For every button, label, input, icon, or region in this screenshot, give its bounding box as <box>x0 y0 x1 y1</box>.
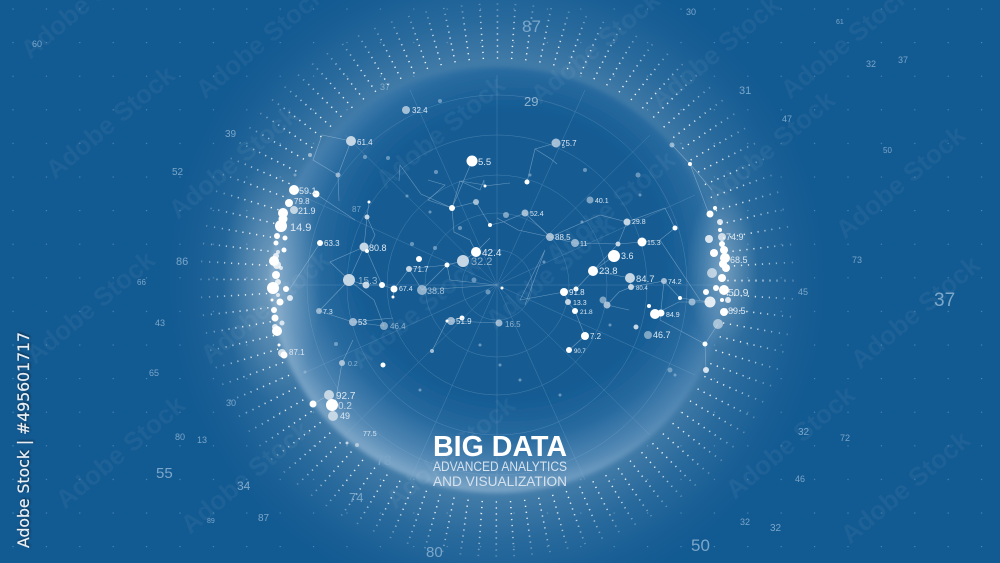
value labels on the sphere: 5 <box>562 144 565 150</box>
value labels on the sphere: 77.5 <box>363 431 377 438</box>
scattered outer numbers: 37 <box>934 290 955 311</box>
right edge dot cluster <box>702 206 731 373</box>
scattered outer numbers: 37 <box>898 55 908 65</box>
scattered outer numbers: 32 <box>770 523 782 534</box>
scattered outer numbers: 52 <box>172 167 184 178</box>
value labels on the sphere: 87 <box>352 205 361 214</box>
subtitle: AND VISUALIZATION <box>433 474 567 489</box>
stock watermarks: Adobe Stock <box>720 379 861 505</box>
stock watermarks: Adobe Stock <box>540 144 681 270</box>
value labels on the sphere: 23.8 <box>599 266 618 277</box>
value labels on the sphere: 29 <box>524 94 538 109</box>
scattered outer numbers: 47 <box>782 114 792 124</box>
value labels on the sphere: 7.2 <box>590 332 602 341</box>
polar grid <box>280 75 715 490</box>
value labels on the sphere: 92.7 <box>336 391 356 402</box>
stock watermarks: Adobe Stock <box>845 249 986 375</box>
scattered outer numbers: 30 <box>226 398 236 408</box>
value labels on the sphere: 51.9 <box>456 317 472 326</box>
scattered outer numbers: 78 <box>376 452 392 468</box>
stock watermarks: Adobe Stock <box>835 424 976 550</box>
stock watermarks: Adobe Stock <box>380 389 521 515</box>
value labels on the sphere: 49 <box>340 411 350 421</box>
value labels on the sphere: 89.5 <box>728 306 746 316</box>
light network nodes <box>290 106 696 447</box>
scattered outer numbers: 86 <box>176 256 188 268</box>
value labels on the sphere: 5.5 <box>478 157 491 168</box>
title block <box>433 431 567 489</box>
stock watermarks: Adobe Stock <box>163 99 304 225</box>
title: BIG DATA <box>433 431 567 463</box>
value labels on the sphere: 7.3 <box>323 309 333 316</box>
scattered outer numbers: 80 <box>426 544 443 561</box>
scattered outer numbers: 30 <box>686 7 696 17</box>
scattered outer numbers: 61 <box>836 19 844 26</box>
scattered outer numbers: 32 <box>866 59 876 69</box>
stock watermarks: Adobe Stock <box>20 244 161 370</box>
left rim glow <box>222 160 322 400</box>
value labels on the sphere: 91.8 <box>569 288 585 297</box>
value labels on the sphere: 59.1 <box>299 186 317 196</box>
scattered outer numbers: 87 <box>522 17 541 36</box>
stock watermarks: Adobe Stock <box>370 69 511 195</box>
scattered outer numbers: 73 <box>852 255 862 265</box>
value labels on the sphere: 11 <box>580 241 587 248</box>
bright network nodes <box>310 156 692 411</box>
value labels on the sphere: 21.8 <box>580 309 593 316</box>
value labels on the sphere: 79.8 <box>294 197 310 206</box>
right rim glow <box>686 188 758 348</box>
value labels on the sphere: 32.2 <box>471 256 492 268</box>
value labels on the sphere: 15.3 <box>647 240 661 247</box>
value labels on the sphere: 74.2 <box>668 279 682 286</box>
scattered outer numbers: 87 <box>258 513 270 524</box>
scattered outer numbers: 32 <box>740 517 750 527</box>
constellation links <box>289 135 718 416</box>
scattered outer numbers: 55 <box>156 465 173 482</box>
value labels on the sphere: 21.9 <box>298 206 316 216</box>
value labels on the sphere: 68.5 <box>730 255 748 265</box>
stock id sidebar text: Adobe Stock | #495601717 <box>14 332 33 548</box>
scattered outer numbers: 39 <box>225 129 237 140</box>
value labels on the sphere: 46.7 <box>653 330 671 340</box>
stock watermarks: Adobe Stock <box>40 59 181 185</box>
value labels on the sphere: 16.5 <box>505 320 521 329</box>
scattered outer numbers: 31 <box>739 85 751 97</box>
value labels on the sphere: 80.4 <box>636 286 648 292</box>
value labels on the sphere: 42.4 <box>482 248 502 259</box>
stock watermarks: Adobe Stock <box>175 414 316 540</box>
scattered outer numbers: 46 <box>795 474 805 484</box>
value labels on the sphere: 87.1 <box>289 348 305 357</box>
value labels on the sphere: 84.9 <box>666 312 680 319</box>
value labels on the sphere: 13.3 <box>573 300 587 307</box>
value labels on the sphere: 80.8 <box>369 243 387 253</box>
value labels on the sphere: 15.3 <box>358 276 378 287</box>
stock watermarks: Adobe Stock <box>830 119 971 245</box>
value labels on the sphere: 46.4 <box>390 322 406 331</box>
radial dot rings <box>201 4 793 556</box>
value labels on the sphere: 90.7 <box>574 349 586 355</box>
value labels on the sphere: 61.4 <box>357 138 373 147</box>
stock watermarks: Adobe Stock <box>700 84 841 210</box>
value labels on the sphere: 0.2 <box>348 361 358 368</box>
value labels on the sphere: 37 <box>380 82 390 92</box>
scattered outer numbers: 32 <box>798 427 810 438</box>
scattered outer numbers: 13 <box>197 435 207 445</box>
stock watermarks: Adobe Stock <box>345 249 486 375</box>
scattered outer numbers: 74 <box>349 490 363 505</box>
value labels on the sphere: 38.8 <box>427 286 445 296</box>
left edge dot cluster <box>267 185 320 358</box>
value labels on the sphere: 53 <box>358 318 367 327</box>
stock watermarks: Adobe Stock <box>50 389 191 515</box>
subtitle: ADVANCED ANALYTICS <box>433 459 567 474</box>
value labels on the sphere: 63.3 <box>324 239 340 248</box>
value labels on the sphere: 84.7 <box>636 274 654 285</box>
scattered outer numbers: 89 <box>207 518 215 525</box>
scattered outer numbers: 50 <box>691 536 710 555</box>
value labels on the sphere: 71.7 <box>413 265 429 274</box>
value labels on the sphere: 29.8 <box>632 219 646 226</box>
value labels on the sphere: 50.9 <box>728 287 749 299</box>
scattered outer numbers: 34 <box>237 479 251 493</box>
value labels on the sphere: 88.5 <box>555 233 571 242</box>
scattered outer numbers: 60 <box>32 39 42 49</box>
sphere <box>271 67 723 493</box>
value labels on the sphere: 75.7 <box>561 139 577 148</box>
stock watermarks: Adobe Stock <box>195 244 336 370</box>
value labels on the sphere: 14.9 <box>290 222 311 234</box>
value labels on the sphere: 74.9 <box>726 232 744 242</box>
stock watermarks: Adobe Stock <box>480 209 621 335</box>
value labels on the sphere <box>289 82 749 438</box>
scattered outer numbers: 43 <box>155 318 165 328</box>
scattered outer numbers: 65 <box>149 368 159 378</box>
scattered outer numbers: 45 <box>798 287 808 297</box>
scattered outer numbers: 72 <box>840 433 850 443</box>
scattered outer numbers: 50 <box>883 146 892 155</box>
value labels on the sphere: 0.2 <box>338 401 352 412</box>
value labels on the sphere: 40.1 <box>595 198 609 205</box>
value labels on the sphere: 3.6 <box>621 251 634 261</box>
faint small nodes <box>294 99 676 396</box>
value labels on the sphere: 32.4 <box>412 106 428 115</box>
scattered outer numbers: 66 <box>137 278 146 287</box>
value labels on the sphere: 52.4 <box>530 211 544 218</box>
scattered outer numbers: 80 <box>175 432 185 442</box>
value labels on the sphere: 67.4 <box>399 286 413 293</box>
